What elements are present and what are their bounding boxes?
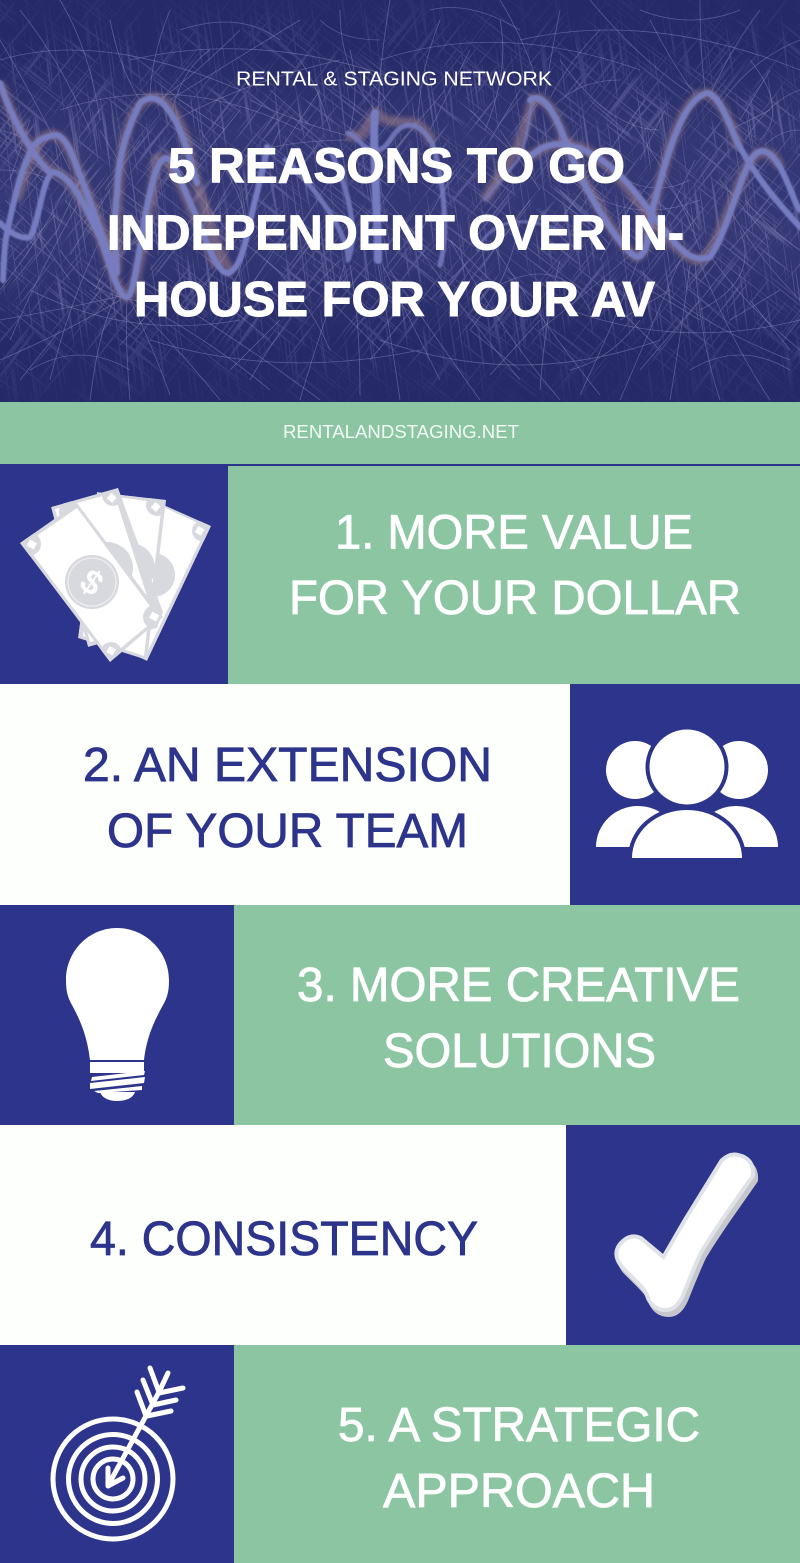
panel: reason 4 — [0, 1125, 800, 1345]
background: light trails — [0, 83, 800, 297]
icon: banknotes — [17, 484, 212, 664]
heading: reason 2: OF YOUR TEAM — [107, 805, 468, 858]
heading: reason 3 — [297, 959, 740, 1078]
heading: reason 2 — [83, 739, 492, 858]
heading: reason 5: 5. A STRATEGIC — [338, 1399, 700, 1452]
icon: check mark — [618, 1157, 754, 1313]
background: sparks — [0, 0, 800, 400]
heading: title: INDEPENDENT OVER IN- — [107, 206, 684, 260]
heading: reason 3: SOLUTIONS — [383, 1025, 656, 1078]
background: warm halo around light trails — [0, 83, 780, 297]
icon: target with arrow — [53, 1368, 183, 1539]
icon: light bulb — [66, 928, 169, 1101]
panel: reason 3 — [0, 905, 800, 1125]
text: organisation name: RENTAL & STAGING NETWORK — [236, 68, 553, 90]
background: fine spark texture — [0, 10, 800, 390]
heading: reason 1 — [289, 506, 741, 625]
heading: reason 1: 1. MORE VALUE — [335, 506, 693, 560]
heading: reason 5 — [338, 1399, 700, 1518]
icon: team of people — [596, 730, 778, 858]
heading: reason 5: APPROACH — [383, 1465, 655, 1518]
heading: title — [107, 138, 684, 327]
heading: title: HOUSE FOR YOUR AV — [134, 272, 655, 327]
panel: reason 5 — [0, 1345, 800, 1563]
heading: reason 4: 4. CONSISTENCY — [90, 1213, 478, 1266]
heading: reason 2: 2. AN EXTENSION — [83, 739, 492, 792]
panel: header — [0, 0, 800, 402]
heading: title: 5 REASONS TO GO — [168, 138, 625, 194]
panel: reason 2 — [0, 684, 800, 905]
icon: banknotes: $ — [73, 562, 110, 604]
panel: website band — [0, 402, 800, 466]
panel: reason 1 — [0, 466, 800, 684]
heading: reason 3: 3. MORE CREATIVE — [297, 959, 740, 1012]
heading: reason 1: FOR YOUR DOLLAR — [289, 572, 741, 625]
text: website: RENTALANDSTAGING.NET — [283, 421, 519, 442]
